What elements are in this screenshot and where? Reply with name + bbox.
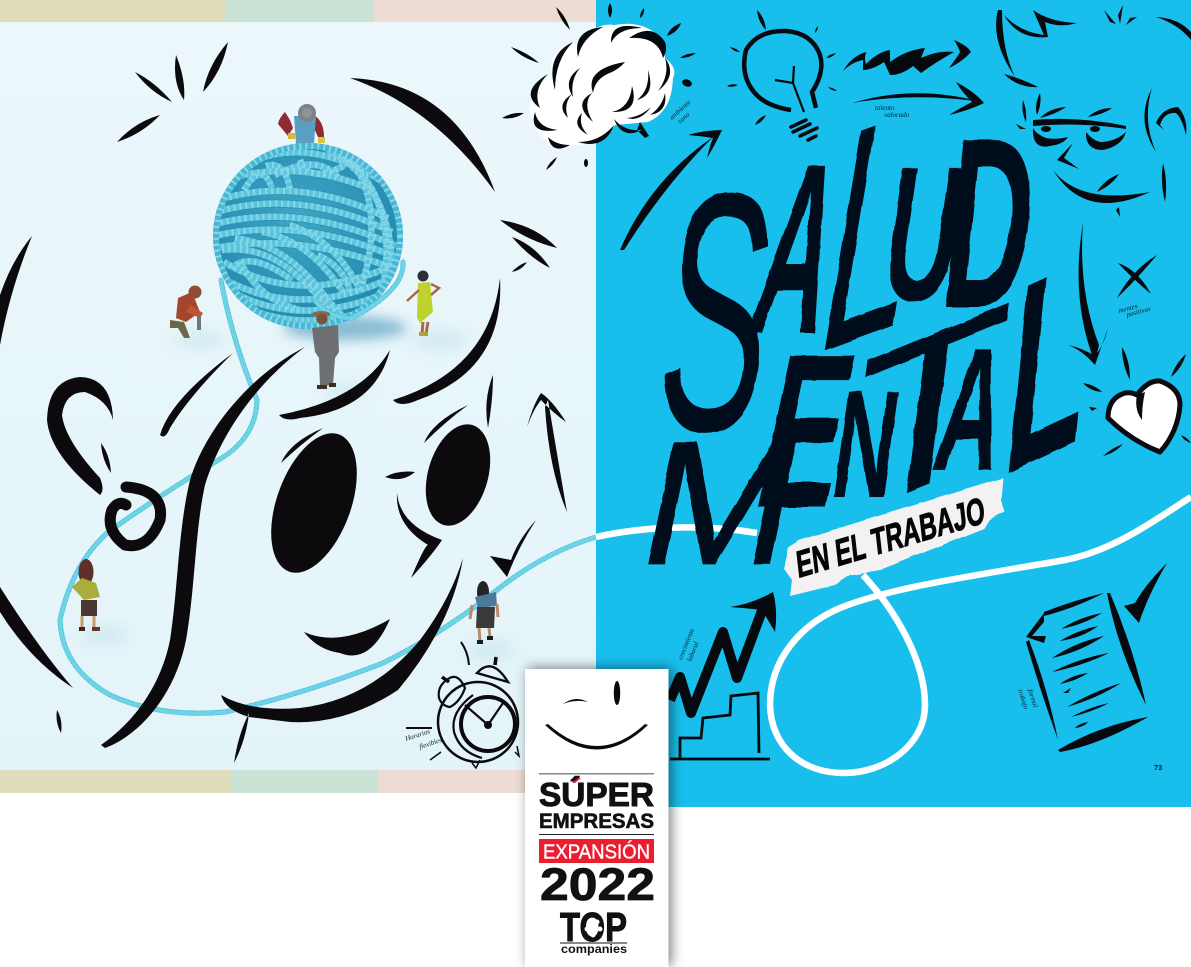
- document text lines: [1052, 613, 1121, 728]
- doodle: top-left ticks: [117, 42, 228, 142]
- badge rule: [539, 773, 654, 774]
- doodle: long curves above the eyes: [160, 278, 500, 436]
- check mark: [1124, 563, 1167, 623]
- handwritten note: valued talent line two: valorado: [884, 111, 910, 119]
- handwritten note: work tasks: trabajo: [1016, 688, 1030, 711]
- handwritten note: work tasks line two: formal: [1026, 688, 1039, 708]
- handwritten note: valued talent: talento: [875, 104, 895, 112]
- brush face doodle on left page: [0, 42, 567, 763]
- doodle: right eye: [415, 417, 501, 533]
- title: SALUD MENTAL in brush lettering: S: [644, 122, 791, 503]
- badge year: 2022: [540, 859, 655, 910]
- doodle: big face contour: [101, 347, 305, 748]
- badge icon: winking smiley: [545, 681, 648, 750]
- doodle: check mark: [490, 520, 536, 577]
- handwritten note: positive mind: mentes: [1117, 302, 1139, 315]
- growth arrow and stairs: [670, 592, 776, 759]
- yarn ball: [213, 144, 403, 330]
- handwritten note: healthy environment line two: sano: [676, 110, 692, 125]
- handwritten note: career growth line two: laboral: [685, 641, 701, 663]
- right page background: [596, 0, 1191, 807]
- handwritten note: career growth: crecimiento: [676, 627, 696, 661]
- title: SALUD MENTAL in brush lettering: D: [933, 87, 1048, 359]
- doodle: left eye: [254, 422, 374, 584]
- figure: man on top of ball: [278, 104, 325, 144]
- caricature face doodle: [996, 5, 1191, 217]
- doodle: mouth: [304, 619, 390, 655]
- badge accent in red: [572, 778, 581, 783]
- badge heading: SÚPER: SÚPER: [539, 776, 654, 813]
- handwritten note: flexible hours line two: flexibles: [418, 736, 443, 751]
- ball shadow: [283, 316, 407, 340]
- light bulb doodle: [727, 10, 837, 140]
- doodle: hair marks: [500, 220, 557, 272]
- face: hair: [996, 5, 1191, 87]
- handwritten note: flexible hours: Horarios: [403, 727, 431, 743]
- figure: woman in green dress: [407, 270, 439, 336]
- doodle: left head edges: [0, 236, 73, 733]
- doodle: chin contour: [221, 558, 463, 763]
- handwritten note: positive mind line two: positivas: [1124, 305, 1152, 319]
- figure: kneeling man: [170, 286, 203, 338]
- heart doodle: [1083, 347, 1191, 456]
- figure: man in grey suit: [312, 311, 339, 389]
- brush swash behind subtitle: [785, 478, 1005, 596]
- document doodle: [1026, 593, 1148, 752]
- title: SALUD MENTAL in brush lettering: M: [626, 406, 817, 601]
- down arrow: [1068, 223, 1108, 365]
- white loop line on right page: [596, 497, 1191, 773]
- bulb rays: [727, 10, 837, 125]
- subtitle: EN EL TRABAJO: EN EL TRABAJO: [794, 488, 987, 586]
- badge rule two: [539, 834, 654, 835]
- badge logo: companies: companies: [561, 944, 627, 956]
- figure: woman with blue top: [470, 581, 498, 644]
- face: cheek and ear: [1144, 88, 1186, 202]
- chart: rising zigzag arrow: [670, 600, 766, 713]
- alarm clock doodle: [406, 642, 519, 768]
- title: SALUD MENTAL in brush lettering: [626, 35, 1104, 601]
- chart: stairs: [670, 693, 770, 759]
- floor shadows: [81, 332, 514, 657]
- title: SALUD MENTAL in brush lettering: L: [801, 35, 946, 423]
- x mark: [1117, 255, 1157, 298]
- top colour stripe: [0, 0, 596, 22]
- face: glasses: [1033, 119, 1126, 129]
- page number: 73: [1154, 763, 1162, 772]
- title: SALUD MENTAL in brush lettering: T: [835, 252, 1022, 568]
- badge logo rule: [560, 942, 627, 944]
- badge: Súper Empresas: [525, 669, 668, 967]
- left page background: [0, 22, 597, 770]
- doodle: forehead arc: [350, 78, 495, 192]
- face: brows and lashes: [1016, 93, 1112, 129]
- badge heading: EMPRESAS: EMPRESAS: [539, 810, 654, 833]
- title: SALUD MENTAL in brush lettering: L: [994, 194, 1104, 536]
- cloud doodle: [502, 3, 696, 170]
- zigzag arrow: [843, 40, 971, 75]
- rope: long strand across left page: [60, 262, 596, 713]
- badge banner: EXPANSIÓN: EXPANSIÓN: [543, 840, 650, 864]
- doodle: up arrow: [527, 393, 567, 512]
- title: SALUD MENTAL in brush lettering: A: [734, 115, 864, 386]
- doodle: eyebrows: [281, 375, 493, 463]
- title: SALUD MENTAL in brush lettering: N: [823, 360, 909, 530]
- cloud ray dots: [584, 78, 693, 167]
- diagonal arrow: [620, 130, 722, 250]
- title: SALUD MENTAL in brush lettering: U: [872, 126, 976, 341]
- title: SALUD MENTAL in brush lettering: A: [923, 310, 1022, 507]
- doodle: ear: [47, 377, 113, 495]
- figure: woman with green top: [72, 559, 100, 631]
- badge logo: TOP: TOP: [560, 904, 627, 950]
- long arrow: [852, 82, 984, 115]
- title: SALUD MENTAL in brush lettering: E: [740, 309, 872, 555]
- cloud rays: [502, 3, 696, 170]
- bottom colour stripe: [0, 770, 528, 793]
- face: nose and mouth: [1053, 143, 1150, 217]
- handwritten note: healthy environment: ambiente: [668, 98, 692, 121]
- doodle: nose: [385, 472, 442, 578]
- doodle: earring: [110, 487, 161, 546]
